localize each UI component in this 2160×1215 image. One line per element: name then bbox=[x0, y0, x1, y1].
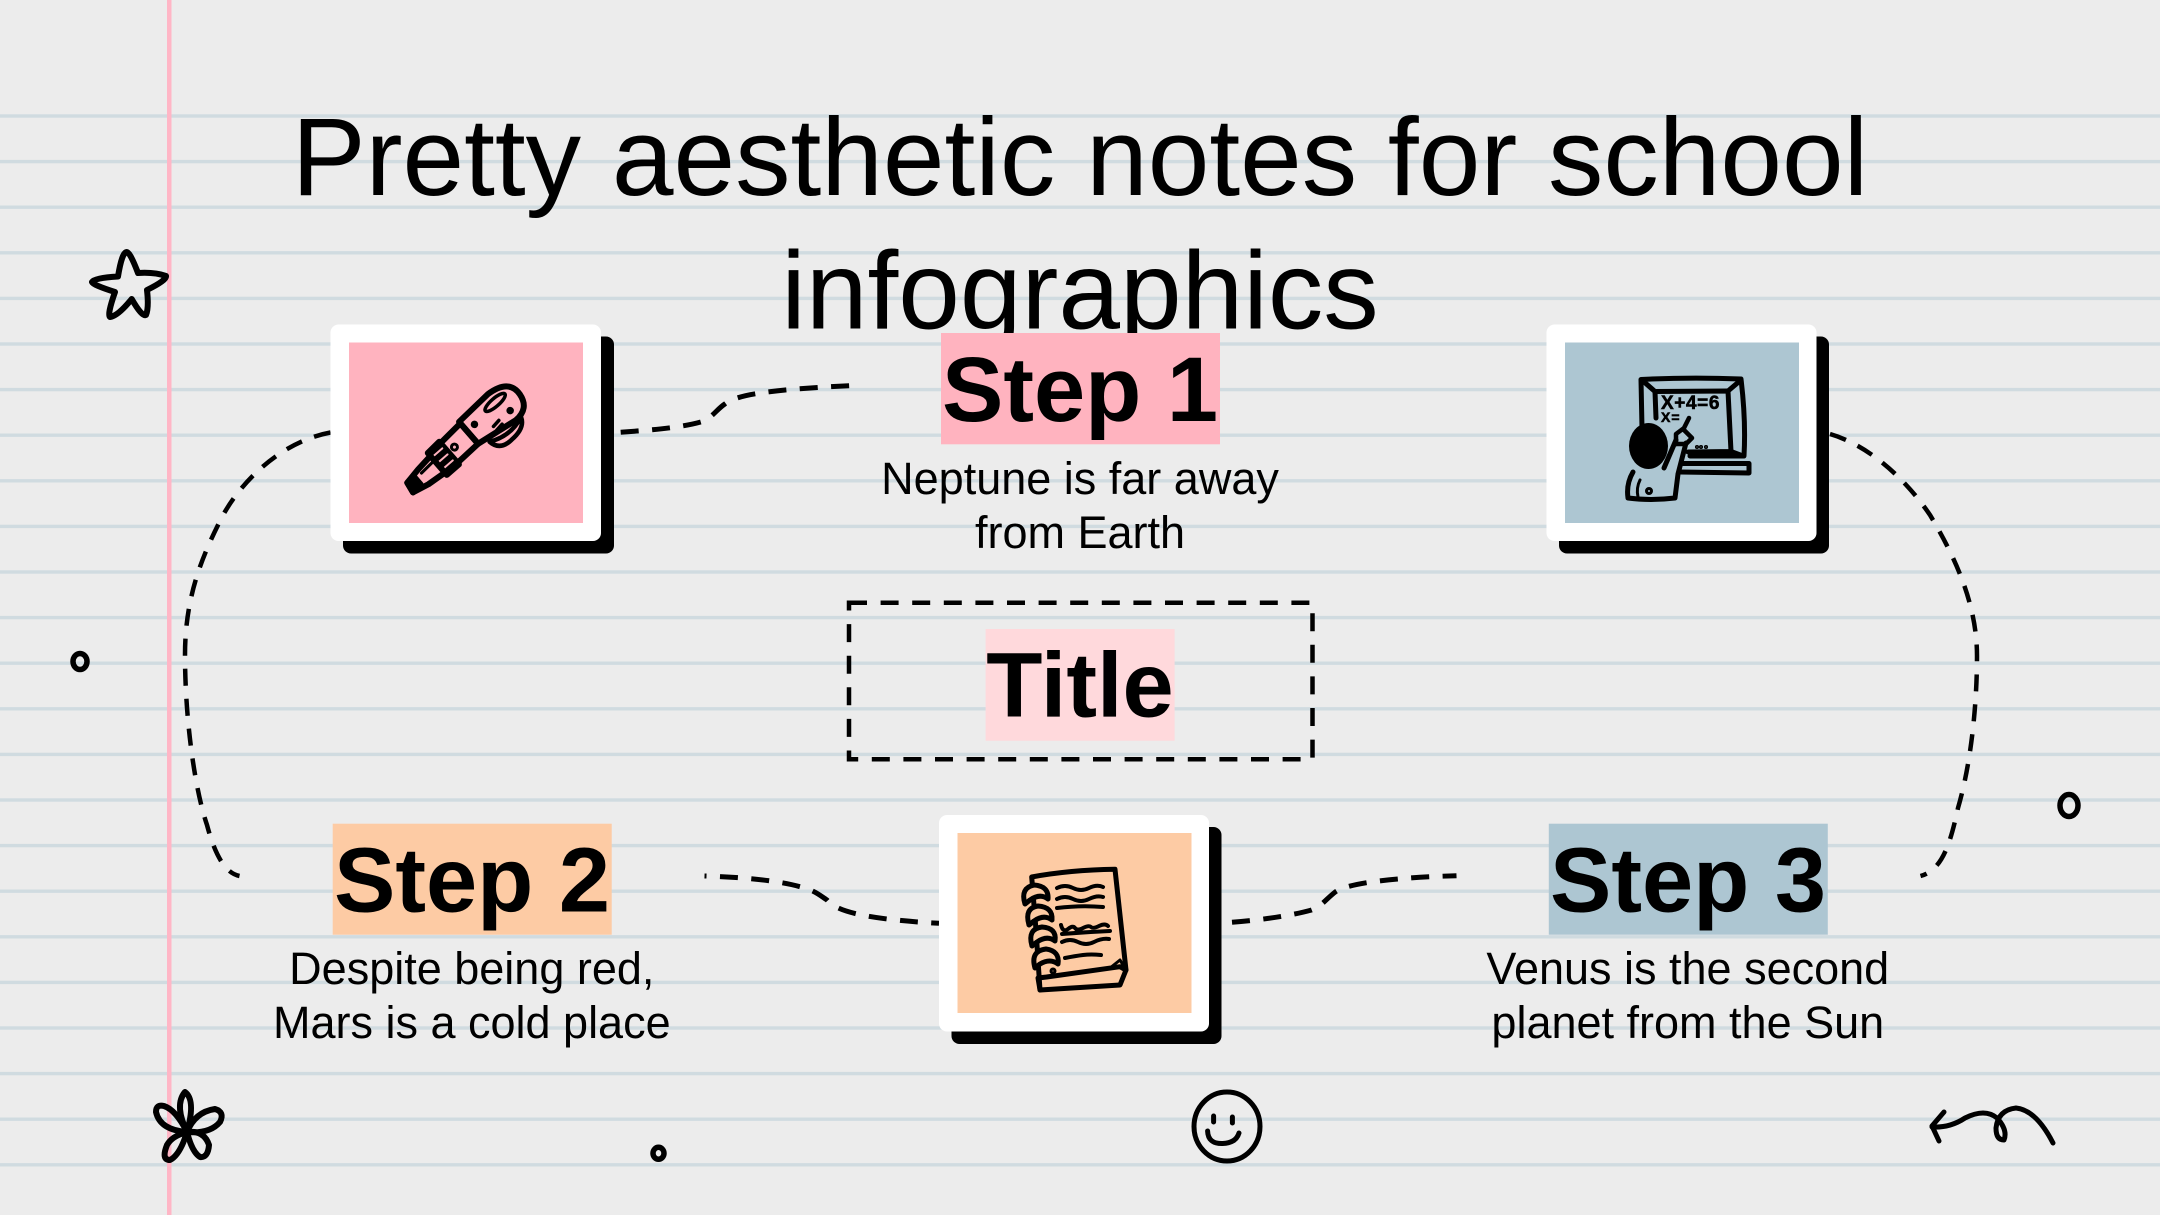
text: step 2 description: Mars is a cold place bbox=[273, 997, 671, 1048]
text: chalkboard equation: X+4=6 bbox=[1661, 393, 1720, 414]
callout: step 1 bbox=[881, 333, 1279, 558]
text: step 2 description: Despite being red, bbox=[289, 943, 654, 994]
panel: notebook image card bbox=[939, 815, 1222, 1044]
title: Pretty aesthetic notes for school bbox=[292, 96, 1868, 219]
icon: flower doodle bbox=[156, 1092, 222, 1160]
panel: central title box: Title bbox=[986, 635, 1174, 737]
text: chalkboard equation: X= bbox=[1661, 409, 1681, 425]
arrow: dashed curve from board card to step 3 bbox=[1830, 434, 1977, 876]
text: step 3 description bbox=[1486, 943, 1889, 1048]
icon: spiral notebook bbox=[1024, 869, 1126, 990]
icon: child at chalkboard bbox=[1628, 378, 1749, 500]
text: step 1 description: from Earth bbox=[975, 507, 1185, 558]
text: step 1 description: Neptune is far away bbox=[881, 453, 1279, 504]
callout: step 1: Step 1 bbox=[942, 339, 1218, 441]
callout: step 2 bbox=[273, 824, 671, 1048]
panel: chalkboard image card bbox=[1546, 324, 1829, 554]
title bbox=[292, 96, 1868, 352]
panel: central title box bbox=[849, 603, 1312, 759]
text: step 3 description: planet from the Sun bbox=[1491, 997, 1884, 1048]
arrow: dashed curve from highlighter card to step 2 bbox=[185, 432, 330, 876]
panel: highlighter image card bbox=[330, 324, 614, 554]
icon: star doodle bbox=[92, 252, 166, 317]
text: step 2 description bbox=[273, 943, 671, 1048]
icon: head bbox=[1629, 423, 1668, 469]
icon: smiley face bbox=[1194, 1092, 1260, 1161]
callout: step 3: Step 3 bbox=[1550, 830, 1826, 932]
icon: highlighter bbox=[397, 378, 539, 511]
icon: curly arrow doodle bbox=[1932, 1108, 2053, 1143]
icon: small circle bottom bbox=[653, 1147, 664, 1159]
icon: small circle left bbox=[73, 654, 87, 670]
callout: step 3 bbox=[1486, 824, 1889, 1048]
title: infographics bbox=[781, 230, 1379, 352]
arrow: dashed curve from step 2 to notebook card bbox=[704, 876, 939, 923]
icon: small circle right bbox=[2060, 794, 2078, 816]
callout: step 2: Step 2 bbox=[334, 830, 610, 932]
text: chalkboard equation bbox=[1661, 393, 1720, 425]
text: step 1 description bbox=[881, 453, 1279, 558]
text: step 3 description: Venus is the second bbox=[1486, 943, 1889, 994]
arrow: dashed curve from notebook card to step 3 bbox=[1232, 876, 1456, 922]
arrow: dashed curve from highlighter card to step 1 bbox=[621, 386, 850, 432]
